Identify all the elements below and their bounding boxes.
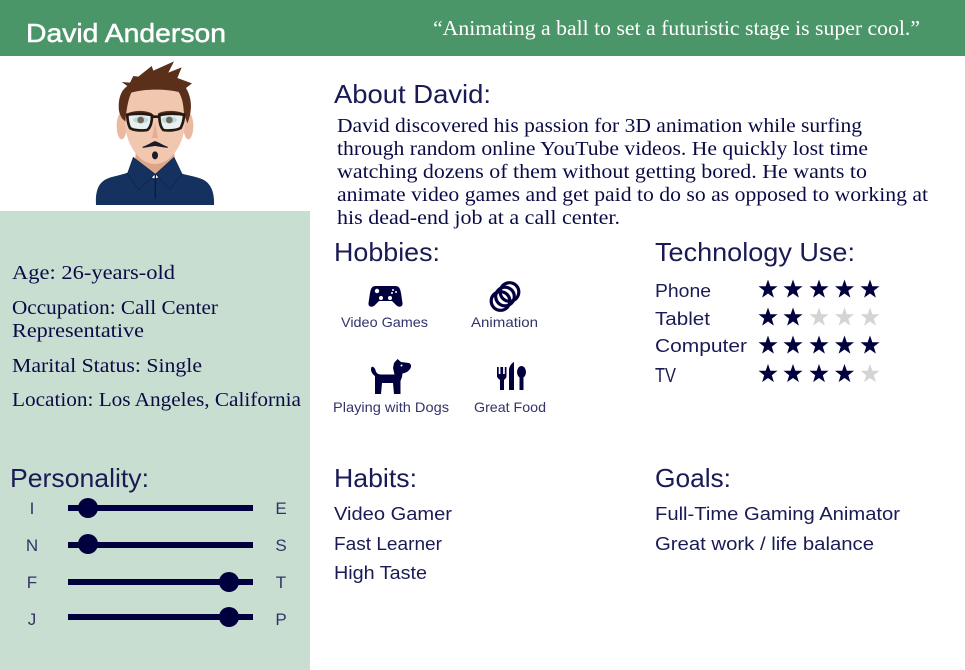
hair <box>119 61 192 123</box>
habits list <box>334 504 452 583</box>
about text block: his dead-end job at a call center. <box>337 207 620 229</box>
demographics text: Marital Status: Single <box>12 355 202 377</box>
technology ratings: TV <box>655 365 677 387</box>
collars <box>127 157 155 190</box>
hobby: animation <box>471 283 538 330</box>
personality sliders: S <box>275 536 287 555</box>
about heading: About David: <box>334 79 491 109</box>
demographics text: Occupation: Call Center <box>12 297 218 319</box>
icon: dog <box>371 359 411 394</box>
icon: cutlery <box>497 362 526 390</box>
face <box>124 87 186 164</box>
neck <box>135 147 175 174</box>
habits heading: Habits: <box>334 463 417 493</box>
hobby: video games <box>341 286 428 330</box>
hobby: food: Great Food <box>474 399 546 415</box>
about text block: animate video games and get paid to do so as opposed to working at <box>337 184 928 206</box>
technology heading: Technology Use: <box>655 237 855 267</box>
personality sliders: J <box>28 610 36 629</box>
panel: demographics sidebar <box>0 211 310 670</box>
personality sliders: T <box>276 573 286 592</box>
ears <box>117 113 127 139</box>
personality heading: Personality: <box>10 463 149 493</box>
goatee <box>152 151 158 159</box>
hobby: video games: Video Games <box>341 314 428 330</box>
habits list: Video Gamer <box>334 504 452 524</box>
hobby: dogs: Playing with Dogs <box>333 399 449 415</box>
demographics text: Location: Los Angeles, California <box>12 389 301 411</box>
personality sliders: N <box>26 536 38 555</box>
goals list: Great work / life balance <box>655 534 874 554</box>
name title: David Anderson <box>26 18 226 48</box>
goals list <box>655 504 900 554</box>
hobby: animation: Animation <box>471 314 538 330</box>
personality sliders: P <box>275 610 287 629</box>
about text block: David discovered his passion for 3D animation while surfing <box>337 115 862 137</box>
hobby: dogs <box>333 359 449 415</box>
demographics text <box>12 262 301 411</box>
habits list: Fast Learner <box>334 534 442 554</box>
technology ratings: Phone <box>655 281 711 301</box>
personality sliders: F <box>27 573 37 592</box>
glasses <box>127 114 184 130</box>
demographics text: Age: 26-years-old <box>12 262 175 284</box>
goals list: Full-Time Gaming Animator <box>655 504 900 524</box>
personality sliders: E <box>275 499 287 518</box>
technology ratings <box>655 280 880 387</box>
icon: gamepad <box>368 286 403 307</box>
shirt <box>96 172 214 205</box>
moustache <box>143 142 168 147</box>
personality sliders: I <box>30 499 34 518</box>
header banner <box>0 0 965 56</box>
nose <box>152 123 158 138</box>
hobbies heading: Hobbies: <box>334 237 440 267</box>
personality sliders <box>26 498 287 629</box>
technology ratings: Computer <box>655 336 747 356</box>
eyebrows <box>127 111 152 116</box>
quote: “Animating a ball to set a futuristic stage is super cool.” <box>433 16 920 40</box>
hobby: food <box>474 362 546 415</box>
avatar portrait <box>96 61 214 205</box>
habits list: High Taste <box>334 563 427 583</box>
icon: rings <box>491 283 519 310</box>
about text block: watching dozens of them without getting bored. He wants to <box>337 161 867 183</box>
eyes <box>133 117 148 123</box>
demographics text: Representative <box>12 320 144 342</box>
about text block <box>337 115 928 229</box>
goals heading: Goals: <box>655 463 731 493</box>
about text block: through random online YouTube videos. He quickly lost time <box>337 138 868 160</box>
technology ratings: Tablet <box>655 309 710 329</box>
